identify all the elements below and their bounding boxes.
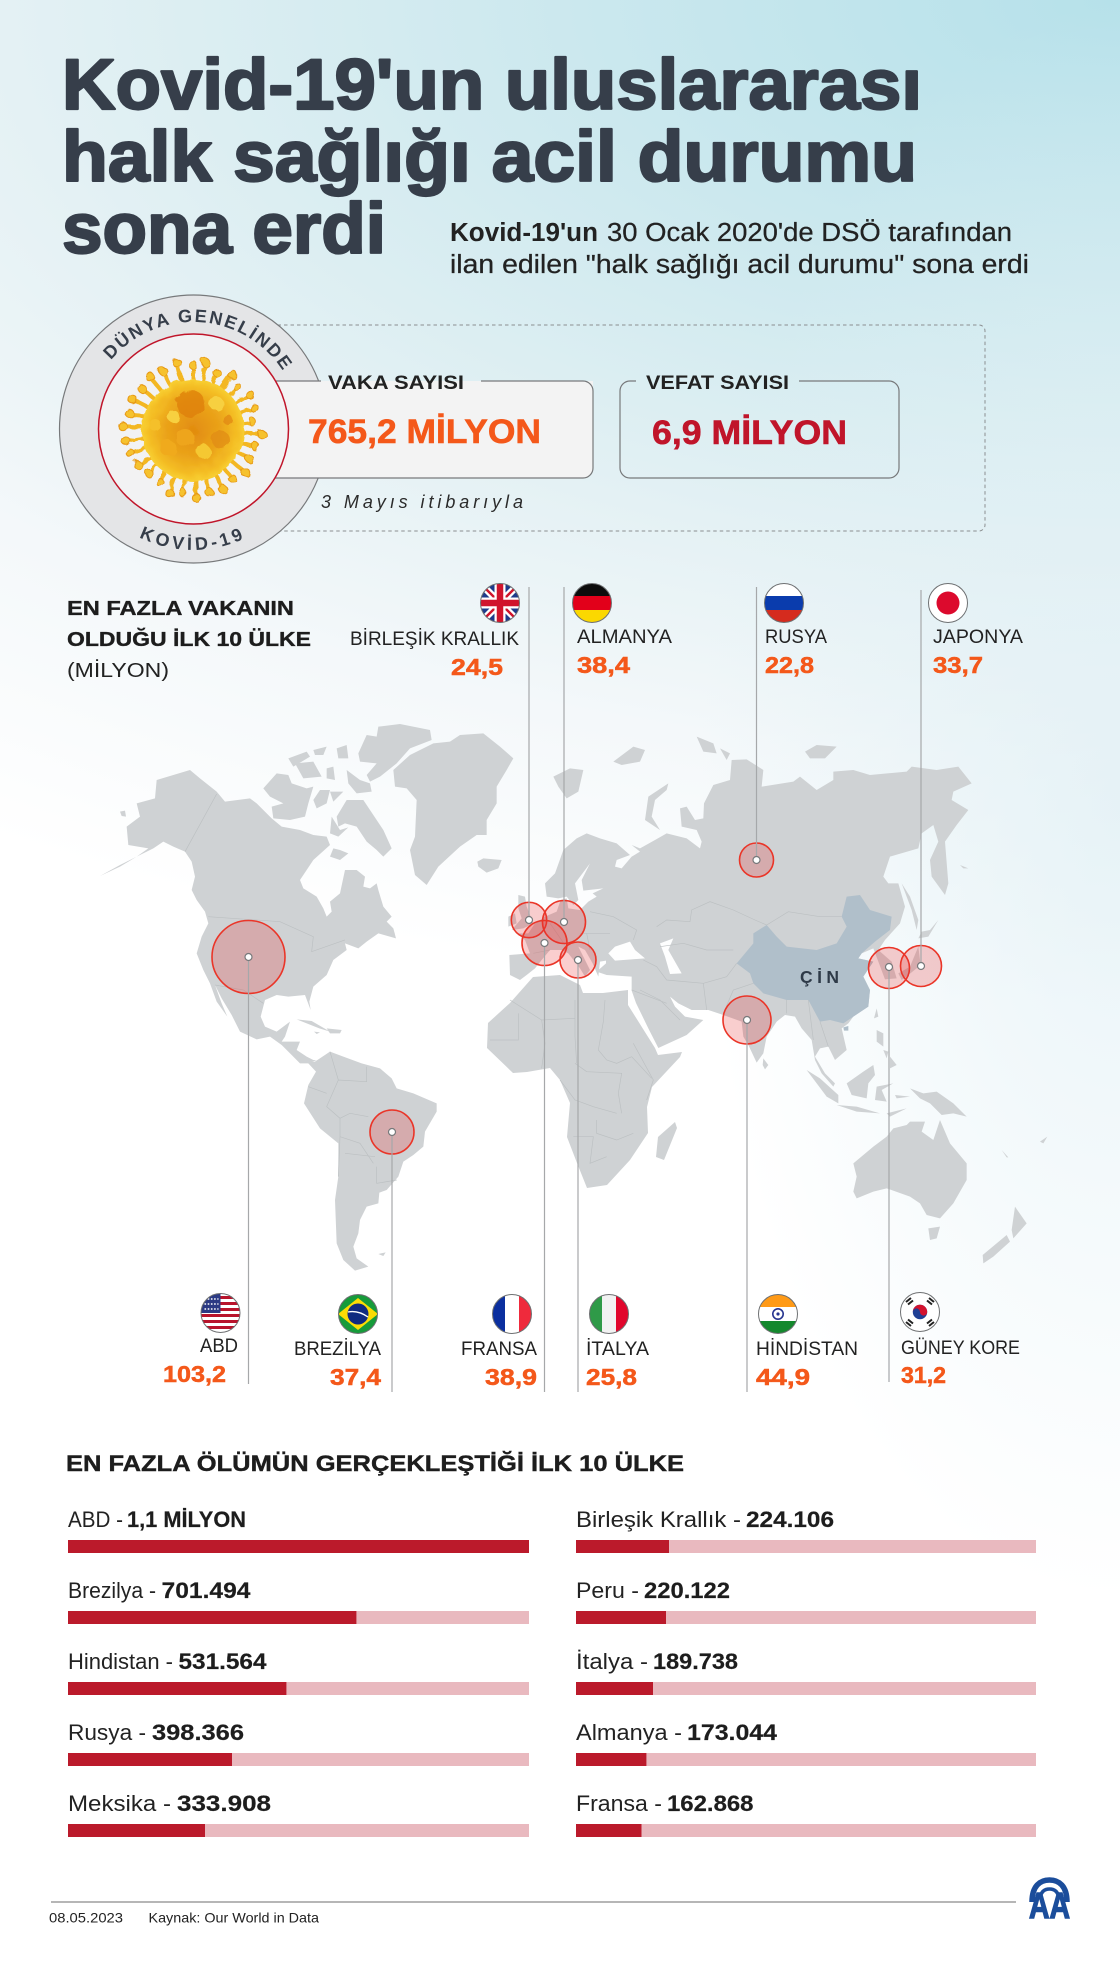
country: Güney Kore xyxy=(900,1292,1020,1388)
americas north xyxy=(100,724,513,1063)
row: Fransa: Fransa - xyxy=(576,1791,662,1816)
row: Rusya: 398.366 xyxy=(152,1720,244,1745)
row: Almanya: 173.044 xyxy=(687,1720,778,1745)
death box xyxy=(620,373,899,478)
country: Güney Kore: 31,2 xyxy=(901,1362,946,1388)
country: Almanya: 38,4 xyxy=(577,652,630,678)
icon: UK flag xyxy=(480,583,520,623)
world map xyxy=(100,587,1047,1392)
row: Hindistan xyxy=(68,1649,529,1695)
row: Meksika: 333.908 xyxy=(177,1791,271,1816)
case box: 765,2 MİLYON xyxy=(308,413,541,451)
bar chart: deaths left column xyxy=(68,1507,529,1837)
row: Rusya xyxy=(68,1720,529,1766)
southeast asia and oceania xyxy=(807,1030,1047,1263)
africa xyxy=(487,975,682,1188)
row: Fransa: 162.868 xyxy=(667,1791,754,1816)
country: Birleşik Krallık: 24,5 xyxy=(451,654,503,680)
case box: VAKA SAYISI xyxy=(328,373,464,394)
country: Brezilya: BREZİLYA xyxy=(294,1339,381,1360)
heading: top cases: EN FAZLA VAKANIN xyxy=(67,597,294,620)
heading: top cases: OLDUĞU İLK 10 ÜLKE xyxy=(67,627,311,651)
icon: Russia flag xyxy=(764,583,804,623)
row: ABD: 1,1 MİLYON xyxy=(127,1507,246,1532)
footer xyxy=(49,1880,1070,1926)
icon: South Korea flag xyxy=(900,1292,940,1332)
date note: 3 Mayıs itibarıyla xyxy=(321,492,523,512)
heading: top cases: (MİLYON) xyxy=(67,659,169,682)
country: Japonya xyxy=(928,584,1023,678)
country: Hindistan xyxy=(756,1294,858,1390)
china xyxy=(737,895,892,1031)
bar chart: deaths right column xyxy=(576,1507,1036,1837)
country: Japonya: 33,7 xyxy=(933,652,983,678)
country: Rusya xyxy=(764,583,827,678)
badge inner circle xyxy=(98,334,288,524)
subtitle xyxy=(450,219,1029,279)
country: Fransa: 38,9 xyxy=(485,1364,537,1390)
icon: virus xyxy=(118,358,266,503)
icon: AA logo: AA xyxy=(1029,1885,1070,1926)
badge curved labels: KOVİD-19 xyxy=(140,526,242,550)
case box xyxy=(230,373,593,478)
location dots xyxy=(245,856,924,1136)
row: Meksika xyxy=(68,1791,529,1837)
row: İtalya: İtalya - xyxy=(576,1649,648,1674)
row: Brezilya: Brezilya - xyxy=(68,1578,156,1603)
icon: USA flag xyxy=(200,1293,240,1333)
country: Brezilya: 37,4 xyxy=(330,1364,381,1390)
title: halk sağlığı acil durumu xyxy=(62,118,917,197)
title: Kovid-19'un uluslararası xyxy=(62,46,922,125)
icon: Japan flag xyxy=(928,584,968,622)
row: Hindistan: 531.564 xyxy=(178,1649,267,1674)
heading: top deaths: EN FAZLA ÖLÜMÜN GERÇEKLEŞTİĞİ İLK 10 ÜLKE xyxy=(66,1451,684,1476)
row: Meksika: Meksika - xyxy=(68,1791,171,1816)
country: Japonya: JAPONYA xyxy=(933,627,1023,648)
title xyxy=(62,46,922,269)
subtitle: Kovid-19'un xyxy=(450,219,598,247)
leader lines xyxy=(248,587,921,1392)
eurasia xyxy=(508,737,972,1087)
subtitle: 30 Ocak 2020'de DSÖ tarafından xyxy=(607,219,1012,247)
country: Hindistan: HİNDİSTAN xyxy=(756,1339,858,1360)
icon: France flag xyxy=(492,1294,532,1334)
row: Peru: Peru - xyxy=(576,1578,639,1603)
row: Brezilya: 701.494 xyxy=(162,1578,251,1603)
country: Birleşik Krallık xyxy=(350,583,520,680)
badge ring xyxy=(60,295,328,563)
icon: Italy flag xyxy=(589,1294,629,1334)
row: Birleşik Krallık xyxy=(576,1507,1036,1553)
country: Almanya xyxy=(572,583,672,678)
row: ABD xyxy=(68,1507,529,1553)
icon: India flag xyxy=(758,1294,798,1334)
country: Fransa xyxy=(461,1294,537,1390)
icon: Brazil flag xyxy=(338,1294,378,1334)
row: Almanya: Almanya - xyxy=(576,1720,682,1745)
row: Peru: 220.122 xyxy=(644,1578,730,1603)
row: İtalya: 189.738 xyxy=(653,1649,738,1674)
country: ABD: ABD xyxy=(200,1336,238,1357)
country: Hindistan: 44,9 xyxy=(756,1364,810,1390)
badge curved labels: DÜNYA GENELİNDE xyxy=(102,310,292,370)
country: Fransa: FRANSA xyxy=(461,1339,537,1360)
country: İtalya: 25,8 xyxy=(586,1364,637,1390)
label: china: ÇİN xyxy=(800,967,839,987)
row: Birleşik Krallık: 224.106 xyxy=(746,1507,834,1532)
death box: VEFAT SAYISI xyxy=(646,373,789,394)
subtitle: ilan edilen "halk sağlığı acil durumu" sona erdi xyxy=(450,251,1029,279)
badge curved labels xyxy=(102,310,292,550)
row: Birleşik Krallık: Birleşik Krallık - xyxy=(576,1507,741,1532)
case circles xyxy=(212,843,942,1154)
country: İtalya: İTALYA xyxy=(586,1339,649,1360)
country: Güney Kore: GÜNEY KORE xyxy=(901,1338,1020,1359)
country: Almanya: ALMANYA xyxy=(577,627,672,648)
icon: Germany flag xyxy=(572,583,612,623)
dashed frame xyxy=(200,325,985,531)
footer: Kaynak: Our World in Data xyxy=(148,1910,319,1926)
panel: world totals xyxy=(58,294,986,564)
row: Rusya: Rusya - xyxy=(68,1720,146,1745)
country: ABD xyxy=(163,1293,240,1387)
south america xyxy=(297,1019,437,1271)
country: Rusya: 22,8 xyxy=(765,652,814,678)
row: ABD: ABD - xyxy=(68,1507,123,1532)
footer: 08.05.2023 xyxy=(49,1910,123,1926)
row: İtalya xyxy=(576,1649,1036,1695)
death box: 6,9 MİLYON xyxy=(652,414,847,452)
row: Peru xyxy=(576,1578,1036,1624)
title: sona erdi xyxy=(62,190,386,269)
country: Brezilya xyxy=(294,1294,381,1390)
heading: top cases xyxy=(67,597,311,682)
row: Hindistan: Hindistan - xyxy=(68,1649,173,1674)
country: İtalya xyxy=(586,1294,649,1390)
row: Fransa xyxy=(576,1791,1036,1837)
country: Rusya: RUSYA xyxy=(765,627,827,648)
row: Brezilya xyxy=(68,1578,529,1624)
row: Almanya xyxy=(576,1720,1036,1766)
country: Birleşik Krallık: BİRLEŞİK KRALLIK xyxy=(350,629,519,650)
country: ABD: 103,2 xyxy=(163,1361,226,1387)
